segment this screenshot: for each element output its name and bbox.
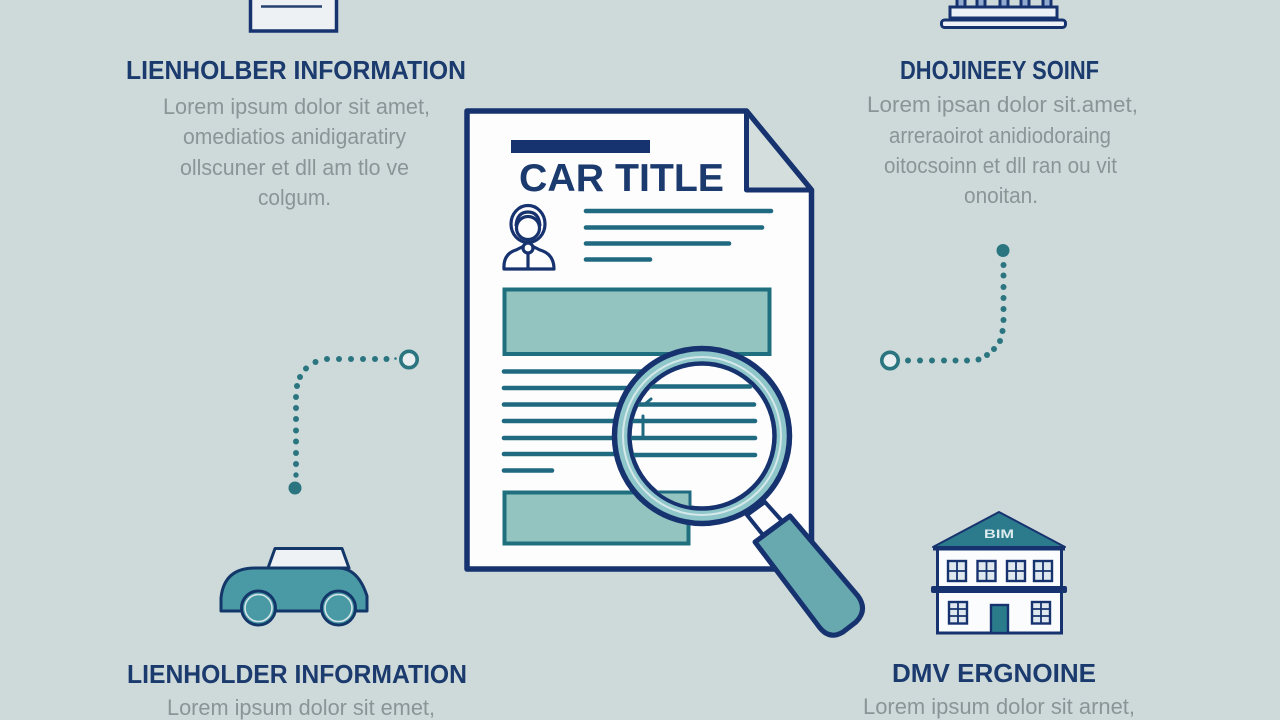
building sign: BIM — [984, 527, 1014, 541]
heading: lienholder information: LIENHOLBER INFORMATION — [126, 55, 466, 85]
magnified text lines — [620, 386, 755, 510]
text block: top-left description: omediatios anidigaratiry — [183, 124, 406, 149]
text block: top-right description: Lorem ipsan dolor sit.amet, — [867, 92, 1138, 117]
title: car title: CAR TITLE — [519, 157, 724, 200]
document sheet — [467, 111, 812, 569]
magnifier rim — [614, 348, 790, 524]
panel: top-left lienholder information — [126, 0, 466, 210]
magnifier handle — [755, 516, 863, 635]
text block: bottom-left description: Lorem ipsum dolor sit emet, — [167, 695, 435, 720]
text block: top-left description — [163, 94, 430, 210]
heading: top-right section: DHOJINEEY SOINF — [900, 55, 1099, 85]
magnifier neck — [747, 502, 782, 535]
text block: top-left description: colgum. — [258, 185, 331, 210]
text block: top-left description: ollscuner et dll am tlo ve — [180, 155, 409, 180]
highlighted field: upper — [504, 290, 770, 354]
text lines: owner details — [586, 211, 771, 260]
text block: top-right description: arreraoirot anidiodoraing — [889, 123, 1111, 148]
document folded corner — [746, 111, 812, 190]
icon: columned building base — [942, 0, 1066, 28]
highlighted field: lower — [504, 492, 688, 544]
text block: top-left description: Lorem ipsum dolor sit amet, — [163, 94, 430, 119]
panel: bottom-right DMV — [863, 512, 1135, 719]
text block: top-right description — [867, 92, 1138, 208]
panel: bottom-left vehicle — [127, 548, 467, 720]
text block: top-right description: onoitan. — [964, 183, 1038, 208]
text block: top-right description: oitocsoinn et dll ran ou vit — [884, 153, 1117, 178]
icon: car — [221, 548, 367, 625]
title bar — [511, 140, 650, 153]
icon: magnifying glass — [614, 348, 863, 635]
connector: right dotted path — [882, 244, 1010, 369]
heading: DMV section: DMV ERGNOINE — [892, 658, 1096, 688]
text lines: body — [504, 372, 650, 470]
connector: left dotted path — [288, 351, 417, 494]
icon: owner portrait — [504, 206, 554, 269]
text block: bottom-right description: Lorem ipsum dolor sit arnet, — [863, 694, 1135, 719]
icon: DMV building — [931, 512, 1067, 633]
heading: lienholder information: LIENHOLDER INFORMATION — [127, 659, 467, 689]
icon: document fragment — [250, 0, 336, 31]
panel: car title document — [467, 111, 812, 569]
panel: top-right courthouse section — [867, 0, 1138, 208]
